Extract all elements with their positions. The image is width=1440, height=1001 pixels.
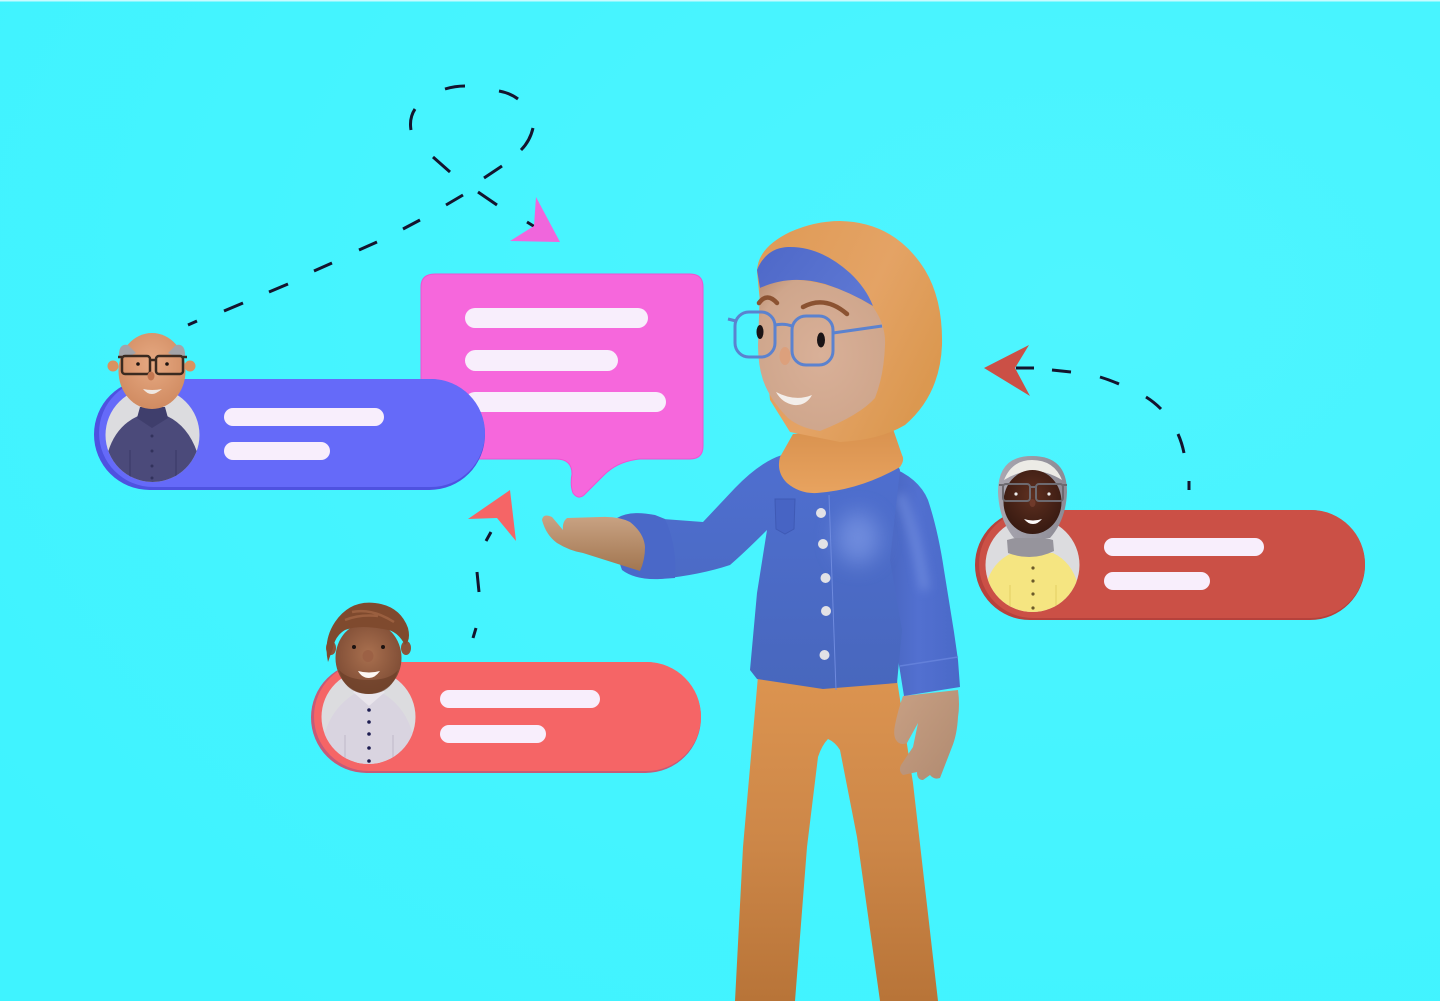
- right hand: [894, 690, 959, 780]
- message pill: coral with man: [311, 603, 701, 773]
- right sleeve: [884, 465, 960, 696]
- text placeholder lines: [440, 690, 600, 743]
- dashed path: red pill to arrow: [1016, 368, 1189, 490]
- cuff: [615, 513, 675, 579]
- text placeholder lines: [224, 408, 384, 460]
- avatar: bald man: [108, 333, 196, 482]
- avatar: woman in grey hijab: [988, 456, 1077, 612]
- shirt highlight: [836, 512, 880, 564]
- smile: [776, 392, 812, 405]
- neck scarf: [779, 426, 903, 493]
- avatar disc: [986, 518, 1080, 612]
- sleeve highlight: [900, 495, 925, 590]
- headband: [757, 247, 873, 306]
- avatar disc: [322, 670, 416, 764]
- pocket: [775, 499, 795, 534]
- avatar disc: [106, 388, 200, 482]
- glasses: [118, 356, 187, 374]
- glasses: [728, 312, 882, 365]
- trousers: [735, 676, 938, 1001]
- main character: woman in orange hijab: [542, 221, 960, 1001]
- avatar: man with brown hair: [324, 602, 412, 764]
- dashed path: blue bubble to pink bubble with loop: [188, 86, 535, 325]
- nose: [780, 347, 790, 365]
- hood: [757, 221, 942, 442]
- shirt torso and arm: [660, 450, 902, 689]
- message pill: red with hijabi woman: [975, 456, 1365, 620]
- text placeholder lines: [1104, 538, 1264, 590]
- arrow: coral: [468, 490, 516, 541]
- eyebrows: [759, 298, 847, 314]
- dashed path: coral pill to arrow: [473, 532, 491, 638]
- eyes: [756, 325, 825, 348]
- face: [758, 280, 885, 431]
- arrow: pink: [510, 197, 560, 242]
- left hand: [542, 516, 645, 571]
- text placeholder lines: [465, 308, 666, 412]
- message pill: blue with man: [94, 333, 485, 490]
- buttons: [816, 508, 831, 660]
- hair: [327, 603, 409, 662]
- arrow: red: [984, 345, 1030, 396]
- speech bubble: pink: [421, 274, 703, 497]
- glasses: [999, 484, 1067, 501]
